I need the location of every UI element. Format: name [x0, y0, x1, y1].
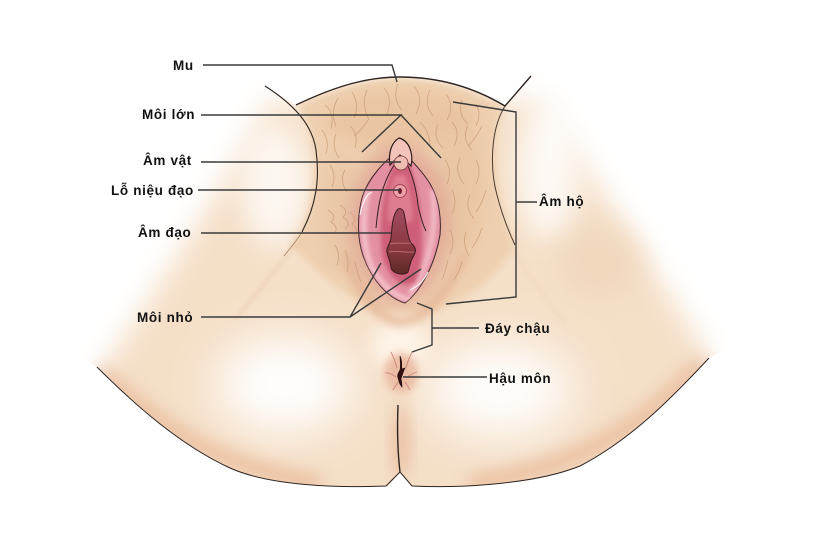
- label: Lỗ niệu đạo: Lỗ niệu đạo: [111, 183, 194, 198]
- right crease: [492, 106, 515, 245]
- label: Mu: Mu: [173, 58, 194, 73]
- lower outline: [97, 358, 709, 487]
- line: Môi lớn: [201, 115, 441, 158]
- mons outline: [296, 76, 531, 106]
- label: Môi lớn: Môi lớn: [142, 107, 195, 122]
- vaginal opening: [387, 209, 415, 274]
- label: Môi nhỏ: Môi nhỏ: [137, 310, 193, 325]
- callout lines: [198, 65, 537, 377]
- line: Hậu môn: [403, 376, 487, 378]
- body silhouette: [80, 77, 720, 520]
- gluteal cleft: [398, 405, 400, 472]
- line: Môi nhỏ: [201, 263, 421, 317]
- vestibule folds: [376, 160, 426, 231]
- urethral opening: [394, 184, 406, 198]
- line: Đáy chậu bracket: [412, 303, 479, 352]
- prepuce and clitoris: [389, 138, 412, 166]
- illustration: anatomical diagram: [80, 76, 720, 520]
- line: Âm vật: [201, 161, 401, 163]
- labia minora: [358, 150, 440, 303]
- left crease: [265, 86, 317, 232]
- label: Âm đạo: Âm đạo: [138, 225, 191, 240]
- label: Hậu môn: Hậu môn: [489, 371, 551, 386]
- line: Lỗ niệu đạo: [198, 189, 400, 191]
- label: Âm hộ: Âm hộ: [539, 194, 584, 209]
- anus: [384, 352, 418, 393]
- label: Đáy chậu: Đáy chậu: [485, 321, 550, 336]
- label: Âm vật: Âm vật: [143, 153, 192, 168]
- central mons and labia majora area: [290, 77, 515, 312]
- line: Âm đạo: [201, 232, 391, 234]
- labia minora and vestibule: [350, 138, 450, 305]
- hair texture: [322, 84, 486, 282]
- thigh crease outlines: [97, 76, 709, 487]
- line: Âm hộ bracket: [446, 102, 537, 304]
- line: Mu: [203, 65, 397, 82]
